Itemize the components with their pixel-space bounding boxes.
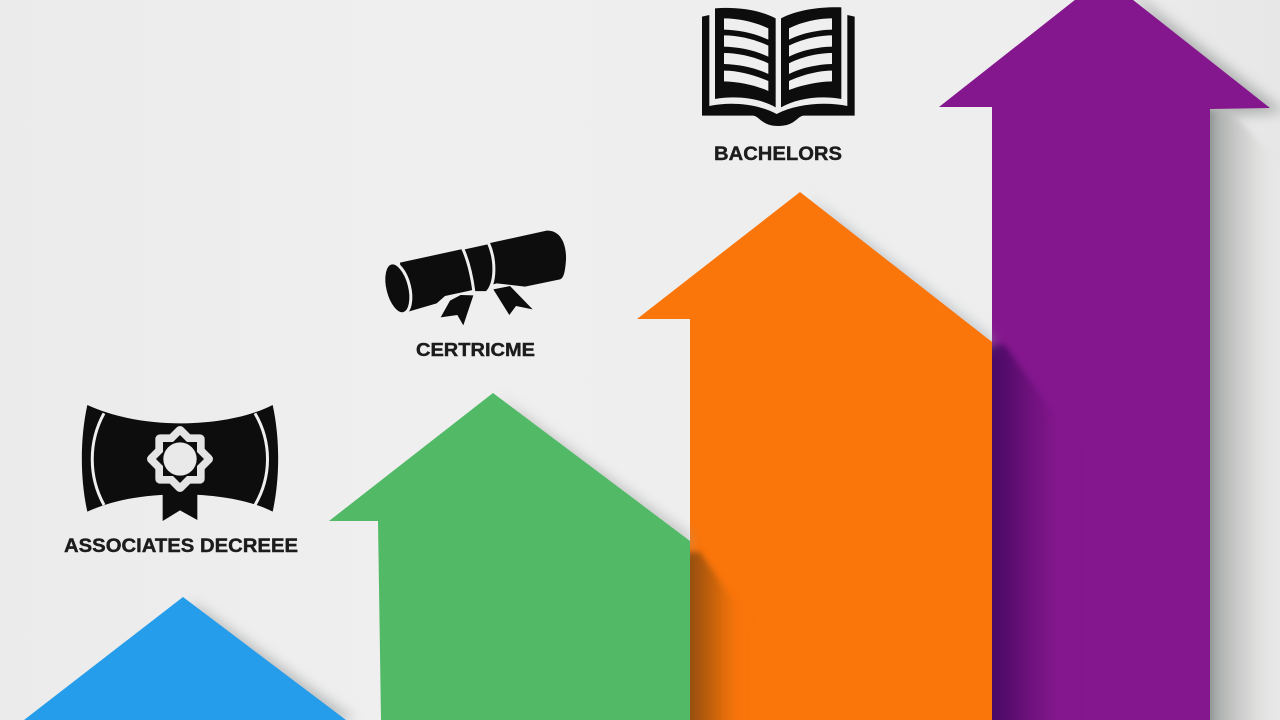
icon: open book [702,7,855,126]
arrow: orange bachelors arrow [637,192,992,720]
arrow: purple doctorate arrow [939,0,1280,720]
label: certificate: CERTRICME [416,340,535,360]
label: bachelors: BACHELORS [714,144,842,165]
arrow: blue associates arrow [24,597,356,720]
icon: diploma scroll [379,231,566,325]
icon: degree banner with seal [82,405,278,521]
label: associates degree: ASSOCIATES DECREEE [64,536,298,557]
arrow: green certificate arrow [329,393,690,720]
